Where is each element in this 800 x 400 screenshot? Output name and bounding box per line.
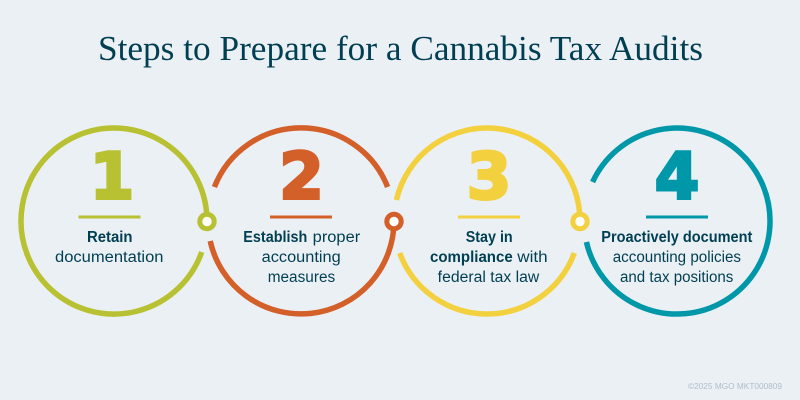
- text: step 3: federal tax law: [438, 269, 540, 286]
- number 4: 4: [655, 140, 699, 214]
- text: step 4: and tax positions: [620, 269, 734, 286]
- panel: step 3 stay in compliance: [396, 128, 587, 314]
- copyright note: ©2025 MGO MKT000809: [688, 382, 783, 391]
- text: step 3: compliance: [430, 249, 513, 266]
- number 2: 2: [279, 140, 324, 214]
- ring: step 2: [210, 128, 394, 314]
- connector node: step 2: [387, 214, 401, 229]
- text: step 3: [430, 229, 548, 286]
- ring: step 1: [21, 128, 207, 314]
- number 3: 3: [467, 140, 511, 214]
- connector node: step 1: [200, 214, 214, 229]
- text: step 2: measures: [268, 269, 335, 286]
- text: step 2: [243, 229, 360, 286]
- text: step 4: Proactively document: [601, 229, 752, 246]
- panel: step 4 proactively document: [586, 128, 770, 314]
- text: step 2: accounting: [262, 249, 341, 266]
- ring: step 4: [586, 128, 770, 314]
- panel: step 1 retain documentation: [21, 128, 214, 314]
- text: step 2: Establish: [243, 229, 307, 246]
- ring: step 3: [396, 128, 580, 314]
- text: step 1: documentation: [55, 249, 164, 266]
- text: step 2: proper: [313, 229, 360, 246]
- connector node: step 3: [573, 214, 587, 229]
- text: step 3: Stay in: [466, 229, 513, 246]
- panel: step 2 establish proper accounting measures: [210, 128, 401, 314]
- text: step 1: Retain: [87, 229, 132, 246]
- title: Steps to Prepare for a Cannabis Tax Audits: [98, 29, 703, 68]
- text: step 4: accounting policies: [613, 249, 741, 266]
- number 1: 1: [90, 140, 134, 214]
- text: step 3: with: [516, 249, 548, 266]
- text: step 1: [55, 229, 164, 266]
- text: step 4: [601, 229, 752, 286]
